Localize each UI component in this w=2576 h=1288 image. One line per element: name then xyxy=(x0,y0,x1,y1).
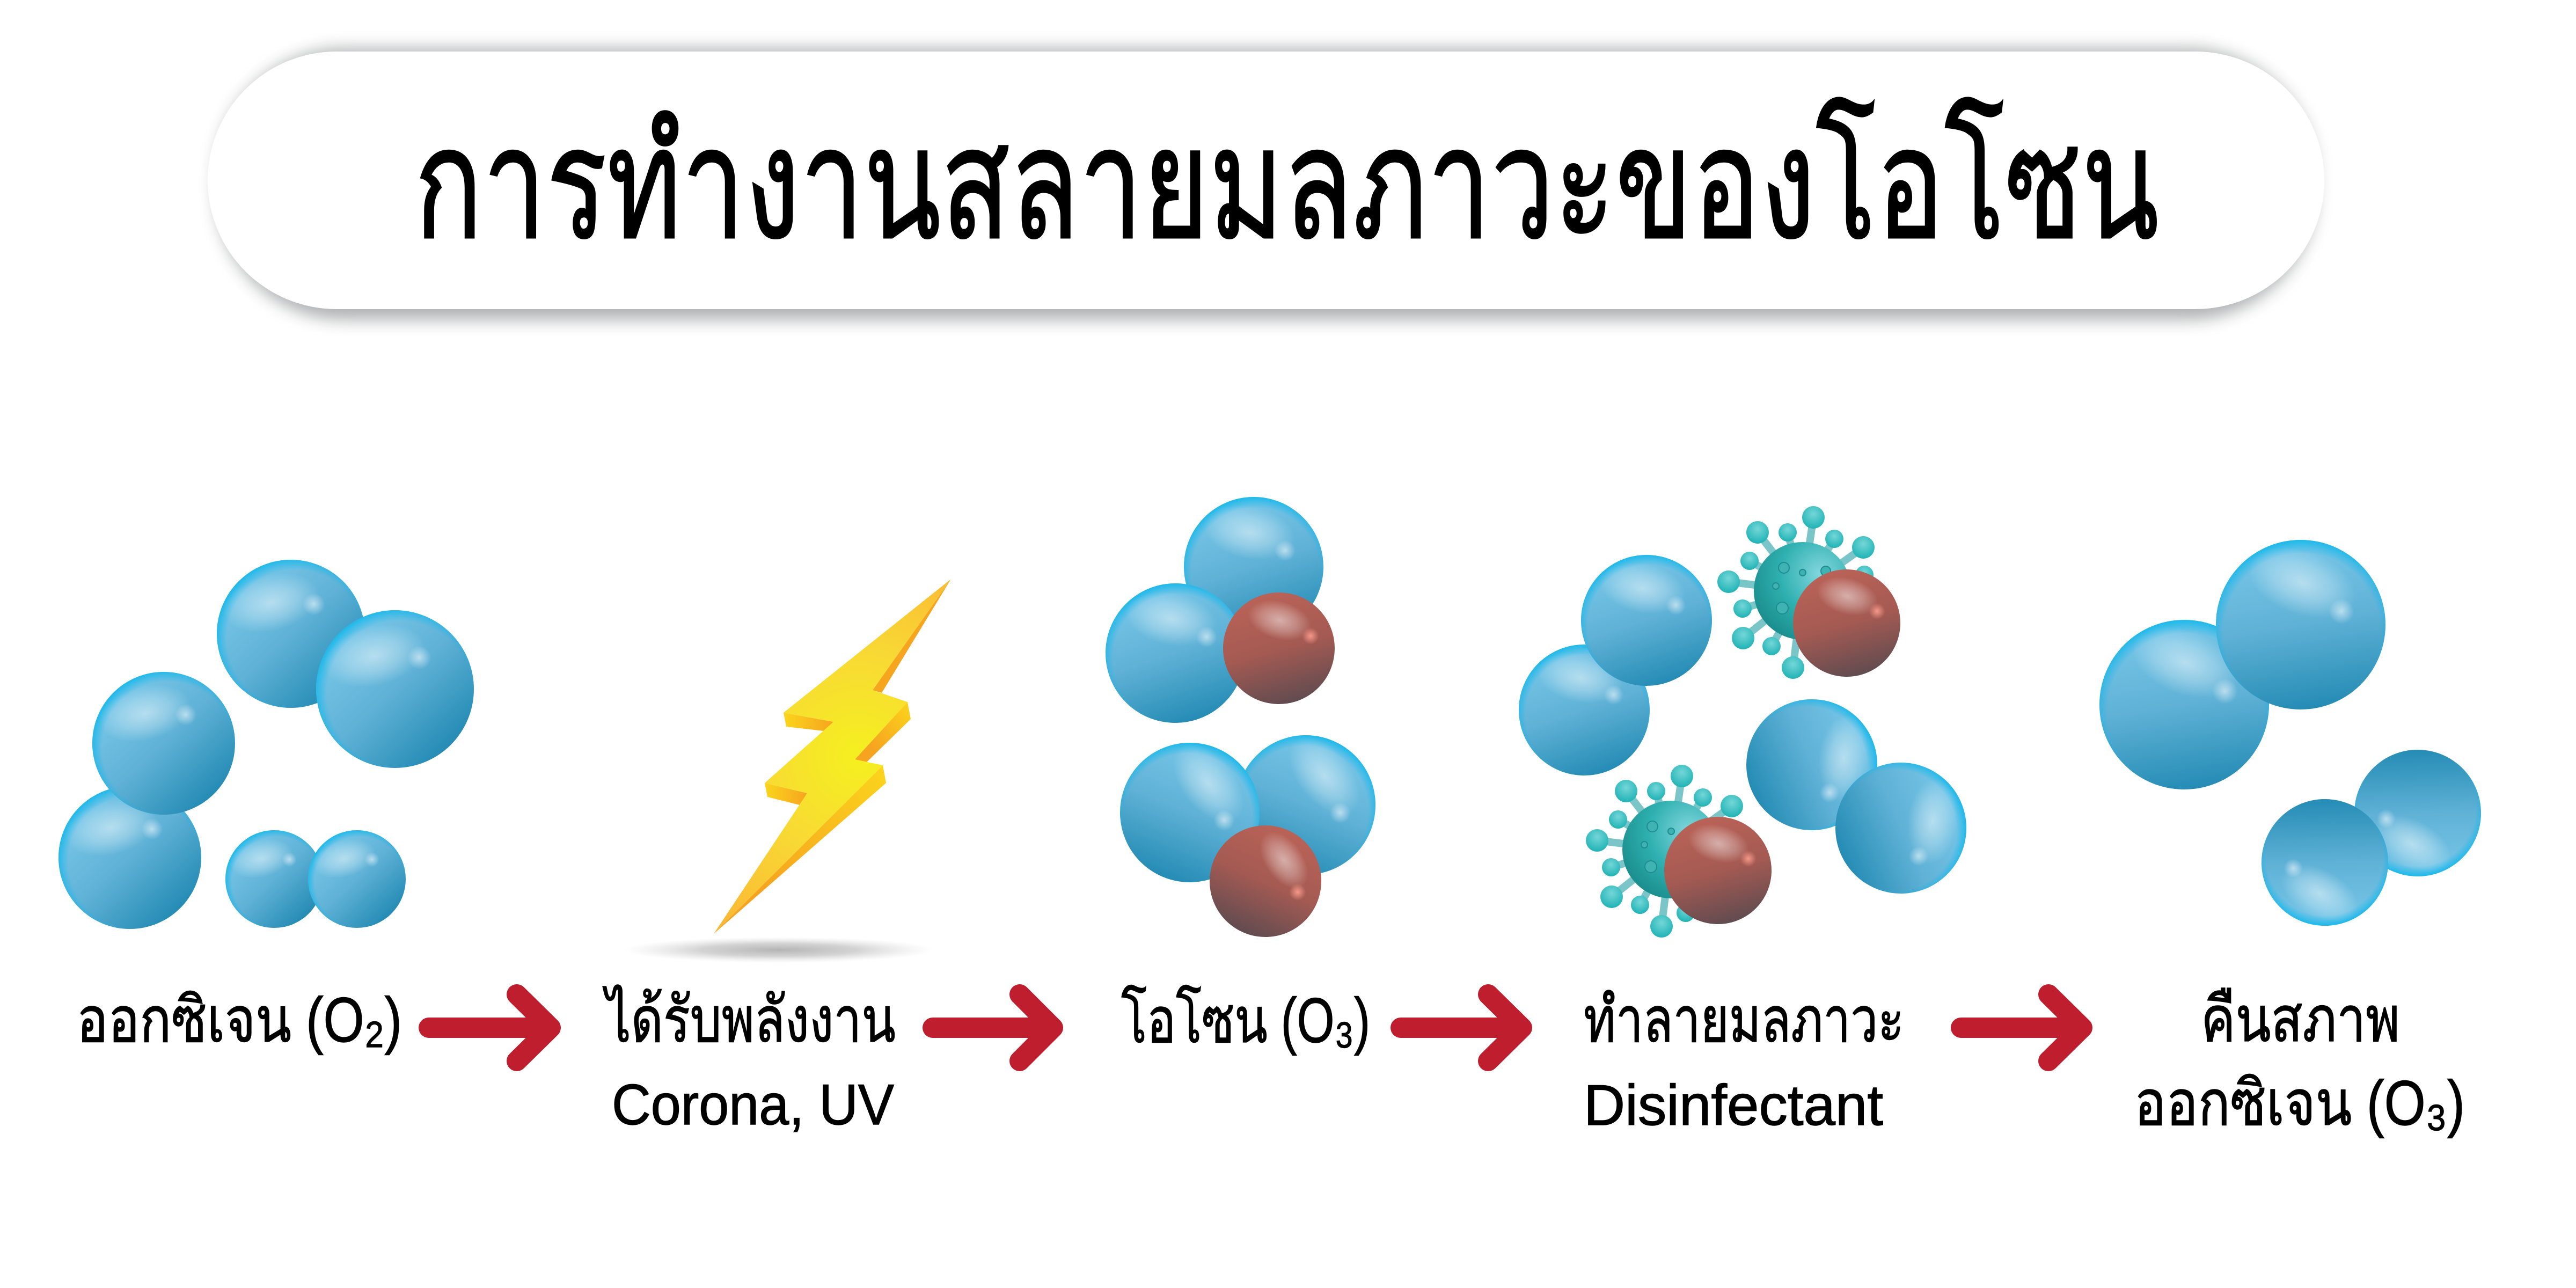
arrow 4 xyxy=(1961,994,2082,1061)
step 1: oxygen molecules xyxy=(58,560,474,929)
step 5 label: คืนสภาพ xyxy=(2201,984,2400,1055)
step 3 label: โอโซน (O₃) xyxy=(1121,985,1370,1056)
step 5 label xyxy=(2134,984,2465,1139)
arrow 2 xyxy=(933,994,1053,1061)
step 3: ozone molecules xyxy=(1082,474,1399,955)
step 2: lightning bolt with ground shadow xyxy=(623,579,951,963)
step 5: restored oxygen molecules xyxy=(2067,507,2507,952)
step 2 label: ได้รับพลังงาน xyxy=(603,985,896,1056)
step 4: ozone oxygen atoms attaching to viruses xyxy=(1497,506,1985,942)
step 1 label: ออกซิเจน (O₂) xyxy=(77,985,402,1056)
step 5 label: ออกซิเจน (O₃) xyxy=(2134,1068,2465,1139)
step 2 label: Corona, UV xyxy=(612,1072,894,1137)
step 4 label: Disinfectant xyxy=(1584,1073,1883,1137)
title banner panel xyxy=(208,48,2324,320)
step 4 label xyxy=(1584,985,1904,1137)
arrow 1 xyxy=(429,994,551,1061)
step 2 label xyxy=(603,985,896,1137)
arrow 3 xyxy=(1401,994,1522,1061)
step 4 label: ทำลายมลภาวะ xyxy=(1584,985,1904,1056)
